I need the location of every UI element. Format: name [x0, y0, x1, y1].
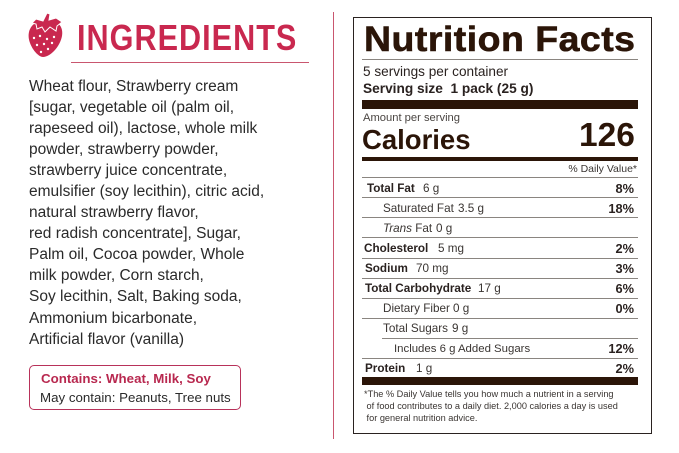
ingredients text: Soy lecithin, Salt, Baking soda,	[29, 288, 242, 305]
row: total sugars: 9 g	[452, 322, 468, 335]
servings per container: 5 servings per container	[363, 64, 508, 78]
thick bar bottom	[362, 377, 638, 385]
amount per serving: Amount per serving	[363, 112, 460, 124]
ingredients text: red radish concentrate], Sugar,	[29, 225, 241, 242]
footnote: for general nutrition advice.	[367, 413, 477, 423]
icon: strawberry	[28, 14, 62, 57]
footnote: *The % Daily Value tells you how much a nutrient in a serving	[364, 389, 614, 399]
row: total carbohydrate: 17 g	[478, 282, 501, 295]
row: added sugars	[394, 341, 634, 356]
row: protein: 1 g	[416, 362, 432, 375]
row: dietary fiber: Dietary Fiber	[383, 302, 450, 315]
row: total fat: 8%	[616, 181, 634, 196]
ingredients text: Palm oil, Cocoa powder, Whole	[29, 246, 244, 263]
ingredients text: Wheat flour, Strawberry cream	[29, 78, 238, 94]
heading: ingredients: INGREDIENTS	[77, 17, 297, 58]
row: dietary fiber: 0%	[616, 301, 634, 316]
medium bar	[362, 157, 638, 161]
allergen callout	[29, 365, 241, 410]
may contain line: May contain: Peanuts, Tree nuts	[40, 390, 231, 405]
daily value header: % Daily Value*	[568, 163, 637, 175]
row: sodium: 3%	[616, 261, 634, 276]
row: protein: Protein	[365, 362, 405, 375]
thick bar	[362, 100, 638, 109]
ingredients text	[29, 78, 264, 348]
row: total sugars: Total Sugars	[383, 322, 448, 335]
row: sodium: Sodium	[365, 262, 408, 275]
row: protein	[365, 361, 634, 376]
row: trans fat: Trans Fat	[383, 222, 432, 235]
row: sodium	[365, 261, 634, 276]
row: saturated fat: 3.5 g	[458, 202, 484, 215]
ingredients text: Ammonium bicarbonate,	[29, 310, 197, 327]
nutrition title: Nutrition Facts	[364, 20, 635, 59]
row: cholesterol: 5 mg	[438, 242, 464, 255]
ingredients text: Artificial flavor (vanilla)	[29, 331, 184, 348]
row: total fat: Total Fat	[367, 182, 415, 195]
row: saturated fat: 18%	[608, 201, 634, 216]
row: added sugars: 12%	[608, 341, 634, 356]
ingredients text: milk powder, Corn starch,	[29, 267, 204, 284]
row: cholesterol: Cholesterol	[364, 242, 428, 255]
row: dietary fiber	[383, 301, 634, 316]
row: trans fat: 0 g	[436, 222, 452, 235]
row: cholesterol	[364, 241, 634, 256]
row: saturated fat: Saturated Fat	[383, 202, 454, 215]
calories label: Calories	[362, 124, 471, 154]
row: cholesterol: 2%	[616, 241, 634, 256]
row: dietary fiber: 0 g	[453, 302, 469, 315]
vertical divider	[333, 12, 334, 439]
contains line: Contains: Wheat, Milk, Soy	[41, 371, 211, 386]
ingredients text: emulsifier (soy lecithin), citric acid,	[29, 183, 264, 200]
row: sodium: 70 mg	[416, 262, 448, 275]
panel: nutrition facts	[353, 17, 652, 434]
ingredients text: rapeseed oil), lactose, whole milk	[29, 120, 257, 137]
serving size: Serving size 1 pack (25 g)	[363, 80, 533, 96]
ingredients text: strawberry juice concentrate,	[29, 162, 227, 179]
footnote	[364, 389, 618, 423]
footnote: of food contributes to a daily diet. 2,000 calories a day is used	[367, 401, 618, 411]
ingredients text: powder, strawberry powder,	[29, 141, 219, 158]
row: added sugars: Includes 6 g Added Sugars	[394, 343, 530, 355]
row: total carbohydrate: 6%	[616, 281, 634, 296]
ingredients text: [sugar, vegetable oil (palm oil,	[29, 99, 234, 116]
row: total fat	[367, 181, 634, 196]
row: total carbohydrate	[365, 281, 634, 296]
ingredients text: natural strawberry flavor,	[29, 204, 199, 221]
row: saturated fat	[383, 201, 634, 216]
row: total carbohydrate: Total Carbohydrate	[365, 282, 471, 295]
row: total fat: 6 g	[423, 182, 439, 195]
row: protein: 2%	[616, 361, 634, 376]
heading underline	[71, 62, 309, 63]
calories value: 126	[579, 117, 635, 154]
